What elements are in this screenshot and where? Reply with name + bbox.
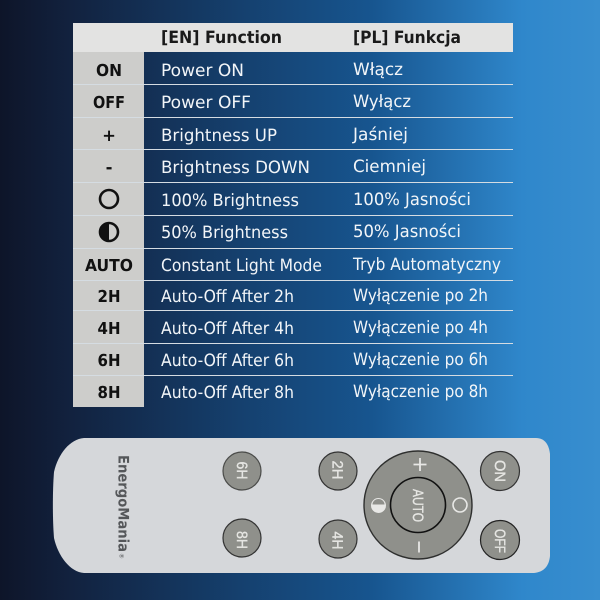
english functions: Auto-Off After 2h [161, 287, 294, 307]
button: OFF [480, 520, 520, 560]
key column: 2H [98, 287, 120, 306]
polish functions: Włącz [353, 60, 403, 80]
key column: OFF [93, 93, 125, 112]
english functions [161, 61, 322, 403]
table header [73, 23, 513, 52]
polish functions: Wyłączenie po 8h [353, 382, 488, 402]
english functions: Auto-Off After 6h [161, 351, 294, 371]
directional pad: AUTO [409, 489, 426, 522]
button: OFF: OFF [491, 529, 508, 553]
table header: [PL] Funkcja [353, 28, 461, 48]
english functions: 100% Brightness [161, 191, 299, 211]
directional pad [364, 451, 472, 559]
table header: [EN] Function [161, 28, 282, 48]
polish functions: 50% Jasności [353, 222, 461, 242]
button: 6H: 6H [233, 462, 250, 480]
button: 8H: 8H [233, 531, 250, 549]
polish functions: Wyłączenie po 4h [353, 318, 488, 338]
english functions: Constant Light Mode [161, 256, 322, 276]
key column: 4H [98, 319, 120, 338]
polish functions: Tryb Automatyczny [352, 255, 501, 275]
polish functions: Wyłączenie po 2h [353, 286, 488, 306]
button: ON [480, 452, 520, 490]
button: 2H: 2H [328, 460, 346, 480]
polish functions: Ciemniej [353, 157, 426, 177]
english functions: Auto-Off After 4h [161, 319, 294, 339]
key column: 6H [98, 351, 120, 370]
polish functions: 100% Jasności [353, 190, 471, 210]
key column: 8H [98, 383, 120, 402]
polish functions [352, 60, 501, 402]
english functions: Brightness DOWN [161, 158, 310, 178]
polish functions: Jaśniej [352, 125, 408, 145]
english functions: Power ON [161, 61, 244, 81]
brand label: EnergoMania [114, 455, 130, 552]
key column: ON [96, 61, 122, 80]
key column: AUTO [85, 256, 133, 275]
english functions: Brightness UP [161, 126, 277, 146]
english functions: Auto-Off After 8h [161, 383, 294, 403]
button: 4H [319, 520, 357, 558]
key column [73, 52, 144, 407]
button: 2H [319, 452, 357, 490]
remote control [53, 438, 550, 573]
button: 8H [223, 519, 261, 557]
remote body [53, 438, 550, 573]
key column: - [106, 158, 112, 177]
button: ON: ON [491, 460, 508, 482]
button: 6H [223, 452, 261, 490]
english functions: 50% Brightness [161, 223, 288, 243]
key column: + [102, 126, 116, 145]
polish functions: Wyłączenie po 6h [353, 350, 488, 370]
brand label: ® [118, 553, 124, 559]
polish functions: Wyłącz [353, 92, 411, 112]
english functions: Power OFF [161, 93, 251, 113]
row dividers [73, 84, 513, 376]
button: 4H: 4H [328, 532, 346, 550]
